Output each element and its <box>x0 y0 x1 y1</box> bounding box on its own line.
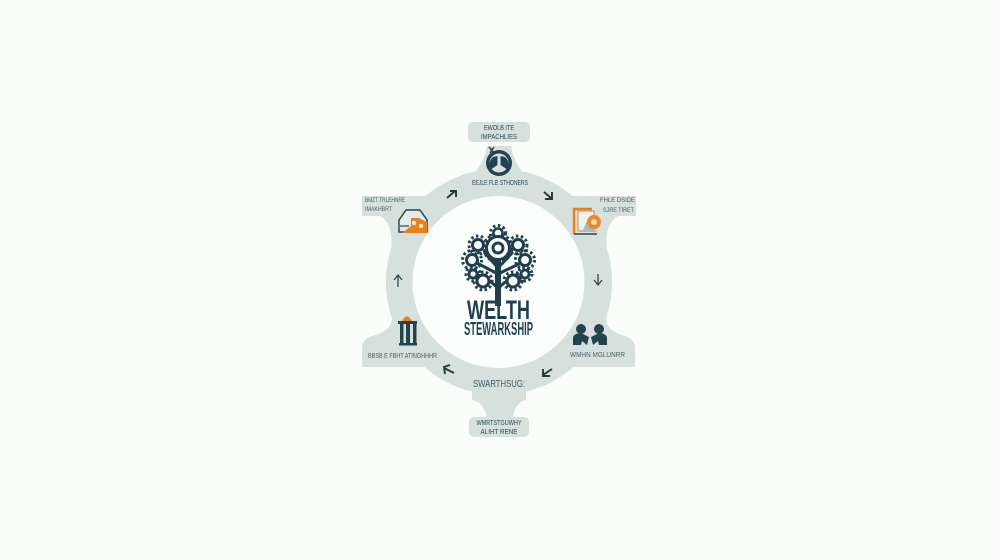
top step label: EEJLE FLE STHONERS <box>472 180 528 187</box>
center title: WELTH <box>467 295 530 325</box>
top label: EWOLB ITE <box>484 125 514 132</box>
icon: top lungs badge <box>486 147 512 176</box>
cycle ring with connector tabs <box>362 146 636 418</box>
arrow: bottom left <box>444 365 454 374</box>
right upper label <box>600 197 636 214</box>
top label: IMPACHLIES <box>481 134 517 141</box>
center title: STEWARKSHIP <box>464 319 533 339</box>
gear foliage <box>466 228 530 287</box>
arrow: right down <box>594 274 602 285</box>
arrow: bottom right <box>543 369 552 376</box>
icon: treasure chest <box>399 210 427 233</box>
bottom label <box>469 417 529 437</box>
icon: people collaborating <box>573 324 607 345</box>
left upper label: BMZT TRLEHNRE <box>365 197 405 204</box>
gear teeth <box>462 226 534 290</box>
bottom right label: WMHN MGLUNRR <box>570 352 625 359</box>
icon: gear tree <box>462 226 534 306</box>
arrow: top right <box>544 192 552 199</box>
bottom label: ALIHT RENE <box>480 429 518 436</box>
top label <box>468 122 530 142</box>
center title <box>464 295 533 339</box>
icon: document with coin <box>574 209 601 234</box>
arrow: top left <box>447 191 456 198</box>
icon: columns with dome <box>398 316 417 346</box>
right upper label: FHLE DSIDE <box>600 197 636 204</box>
tree trunk and branches <box>475 252 523 306</box>
left upper label: IMAKHBRT <box>365 206 392 213</box>
arrow: left up <box>394 275 402 287</box>
bottom left label: BBSB E FBHT ATINGHHHR <box>368 353 437 360</box>
left upper label <box>365 197 405 213</box>
bottom label: WMRTSTGUWHY <box>476 420 522 427</box>
right upper label: SJRE TIRET <box>603 207 634 214</box>
bottom step label: SWARTHSUG: <box>473 379 525 390</box>
center disc <box>412 196 584 368</box>
